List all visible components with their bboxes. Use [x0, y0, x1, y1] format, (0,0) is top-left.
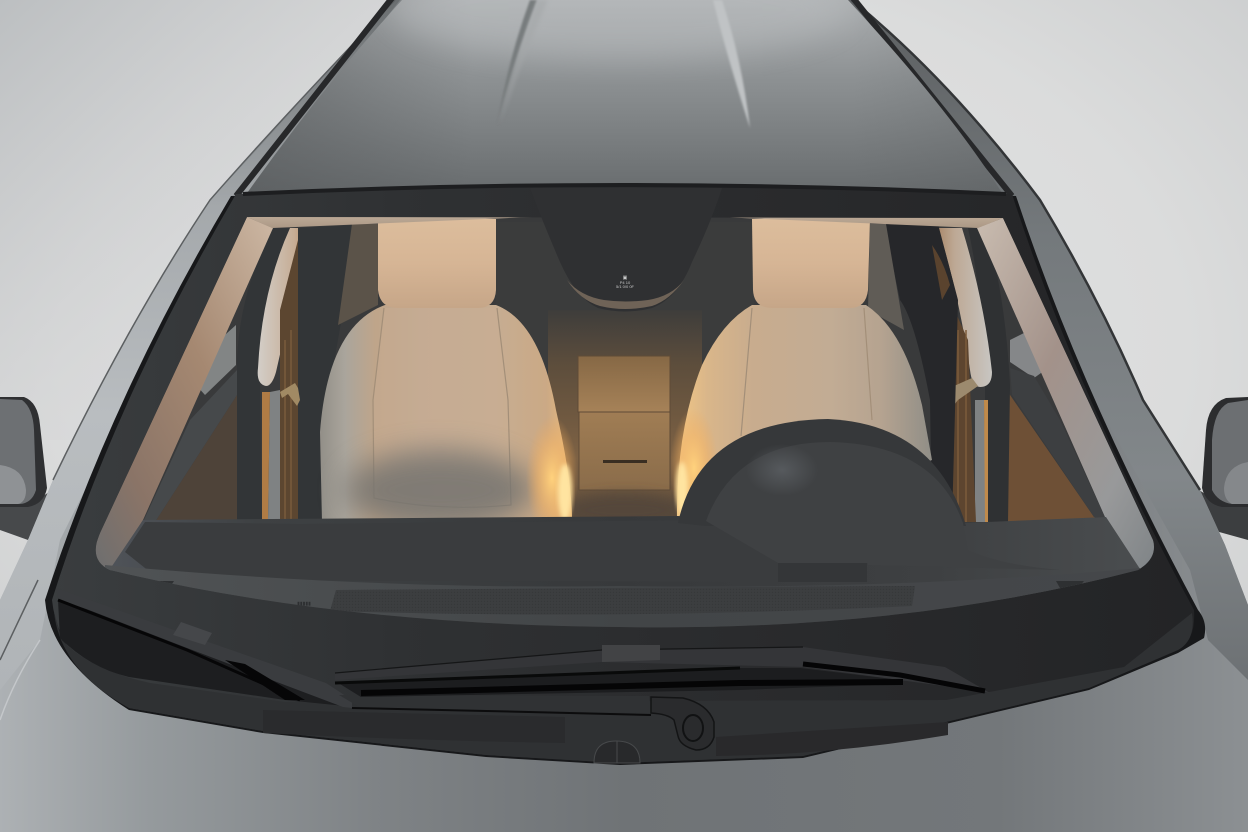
wiper pivot: [651, 697, 714, 750]
left seat: [320, 305, 578, 540]
instrument binnacle: [706, 442, 964, 526]
speaker grille: [330, 586, 915, 615]
left belt and pillar trim: [258, 224, 378, 522]
dash vents: ▮▮▮▮▮: [297, 601, 311, 607]
sun visors: [248, 217, 1002, 228]
black cowl recess: [58, 600, 345, 706]
rear-view mirror housing: P4 10: [620, 280, 631, 285]
right door and window: [968, 228, 1095, 522]
dark roof-rail lines: [236, 0, 1012, 196]
right pillar band: [845, 0, 1248, 680]
steering wheel: [678, 419, 966, 526]
right seat: [670, 305, 932, 528]
dash vents: [152, 581, 1084, 607]
left pillar silver band: [0, 0, 400, 690]
dash step: [846, 563, 867, 582]
side mirror right: [1196, 397, 1248, 540]
left door and window: [144, 325, 237, 520]
left headrest: [378, 219, 496, 308]
right belt and pillar trim: [868, 224, 992, 522]
right side glass panel: [977, 218, 1160, 572]
side mirror left: [0, 397, 52, 540]
roof highlights: [713, 0, 750, 128]
roof: [245, 0, 1004, 196]
mirror label: ▣: [623, 275, 628, 281]
belt buckle: [280, 383, 300, 406]
rear-view mirror housing: 5/1 0/0 0F: [616, 284, 635, 289]
windshield frame and cowl: [45, 185, 1205, 765]
right headrest: [752, 219, 870, 308]
right wiper: [335, 645, 990, 697]
lower cowl: [54, 612, 1193, 763]
centre storage well: [548, 316, 702, 517]
dashboard: [100, 419, 1142, 640]
rear-view mirror housing: [530, 188, 722, 312]
left side glass panel: [90, 217, 273, 572]
left wiper: [56, 588, 714, 750]
cabin interior through glass: [96, 217, 1154, 570]
